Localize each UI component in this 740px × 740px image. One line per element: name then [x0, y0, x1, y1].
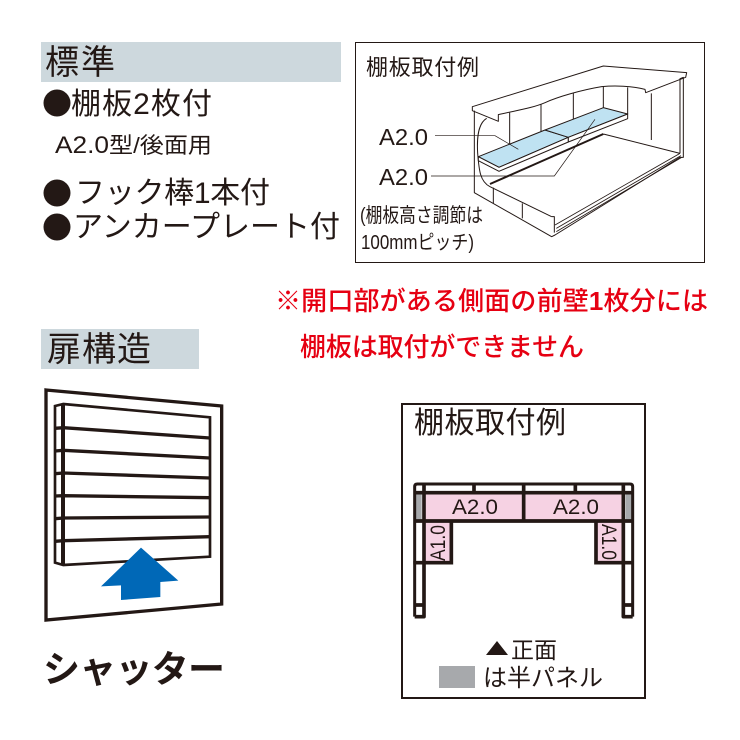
- text: anchor plate included: アンカープレート付: [73, 211, 340, 244]
- heading: standard: [41, 42, 341, 82]
- label: front: [486, 637, 557, 663]
- labels: shelf sizes: A2.0: [452, 496, 498, 519]
- heading: door structure: 扉構造: [47, 331, 151, 369]
- text: hook bar included: フック棒1本付: [75, 177, 270, 210]
- heading: shelf installation example: 棚板取付例: [366, 55, 479, 80]
- diagram: plan view with shelves: [413, 484, 634, 617]
- heading: door structure: [41, 329, 199, 369]
- note: shelf height adjustment pitch: 100mmピッチ): [361, 232, 474, 254]
- label: upper shelf A2.0: A2.0: [379, 124, 428, 150]
- callout: red notice about shelves: ※開口部がある側面の前壁1枚分には: [275, 286, 708, 316]
- labels: shelf sizes: [427, 496, 620, 561]
- labels: shelf sizes: A2.0: [553, 496, 599, 519]
- label: lower shelf A2.0: A2.0: [379, 164, 428, 190]
- half panels: [415, 493, 422, 520]
- panel: shelf installation example, perspective: [356, 42, 704, 262]
- heading: standard: 標準: [45, 44, 115, 82]
- label: shutter: シャッター: [43, 649, 225, 690]
- text: shelves included: 棚板2枚付: [71, 88, 212, 121]
- text: shelf type: A2.0型/後面用: [55, 132, 212, 159]
- callout: red notice about shelves: [275, 286, 708, 362]
- icon: shutter door with up arrow: [46, 390, 222, 620]
- panel: standard features: [41, 42, 341, 244]
- note: shelf height adjustment pitch: [360, 204, 483, 254]
- heading: shelf installation example: 棚板取付例: [414, 407, 566, 440]
- callout: red notice about shelves: 棚板は取付ができません: [300, 332, 584, 362]
- note: shelf height adjustment pitch: (棚板高さ調節は: [360, 204, 483, 227]
- labels: shelf sizes: A1.0: [427, 525, 450, 561]
- panel: shelf installation example, plan view: [402, 404, 645, 698]
- legend: half panel: は半パネル: [483, 665, 603, 692]
- labels: shelf sizes: A1.0: [597, 524, 620, 560]
- pink shelves: [424, 493, 623, 521]
- label: front: 正面: [511, 637, 557, 663]
- illustration: storage interior with shelves: [431, 66, 687, 237]
